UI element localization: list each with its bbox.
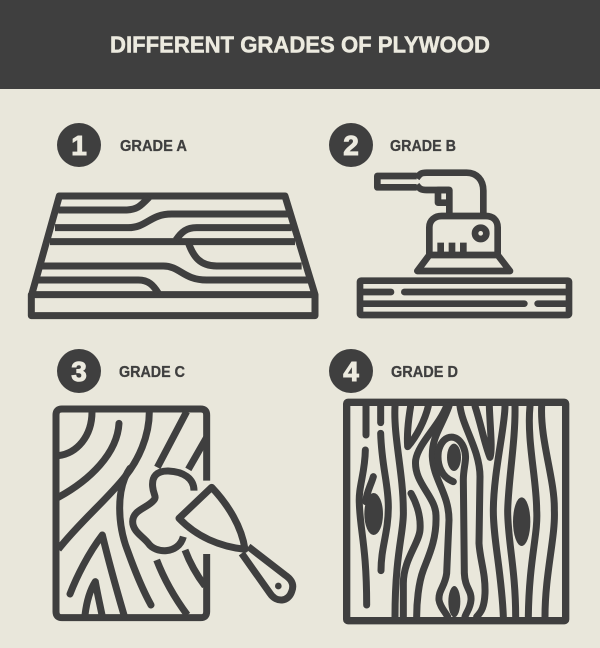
title: DIFFERENT GRADES OF PLYWOOD <box>110 32 490 58</box>
number badge 3 <box>57 349 101 393</box>
number badge 1: 1 <box>71 130 87 161</box>
board <box>360 281 569 315</box>
spatula <box>179 487 293 600</box>
icon: wood panel with putty and spatula (grade C) <box>56 409 293 618</box>
sander <box>377 173 510 271</box>
number badge 4: 4 <box>343 356 359 387</box>
putty blob <box>133 471 194 551</box>
label: grade A: GRADE A <box>120 138 187 155</box>
centre grain and knot <box>416 406 485 617</box>
board outline <box>56 409 207 618</box>
icon: orbital sander on board (grade B) <box>360 173 569 315</box>
icon: knotty wood panel (grade D) <box>347 402 566 621</box>
label: grade B: GRADE B <box>390 138 456 155</box>
number badge 2: 2 <box>343 130 359 161</box>
number badge 1 <box>57 123 101 167</box>
number badge 4 <box>329 349 373 393</box>
board outline <box>347 402 566 621</box>
icon: smooth plywood board (grade A) <box>31 196 315 316</box>
header band <box>0 0 600 89</box>
number badge 2 <box>329 123 373 167</box>
label: grade D: GRADE D <box>391 364 458 381</box>
right grain and knot <box>475 406 554 617</box>
wood grain <box>58 412 207 615</box>
number badge 3: 3 <box>71 356 87 387</box>
label: grade C: GRADE C <box>119 364 185 381</box>
left grain <box>359 405 428 617</box>
